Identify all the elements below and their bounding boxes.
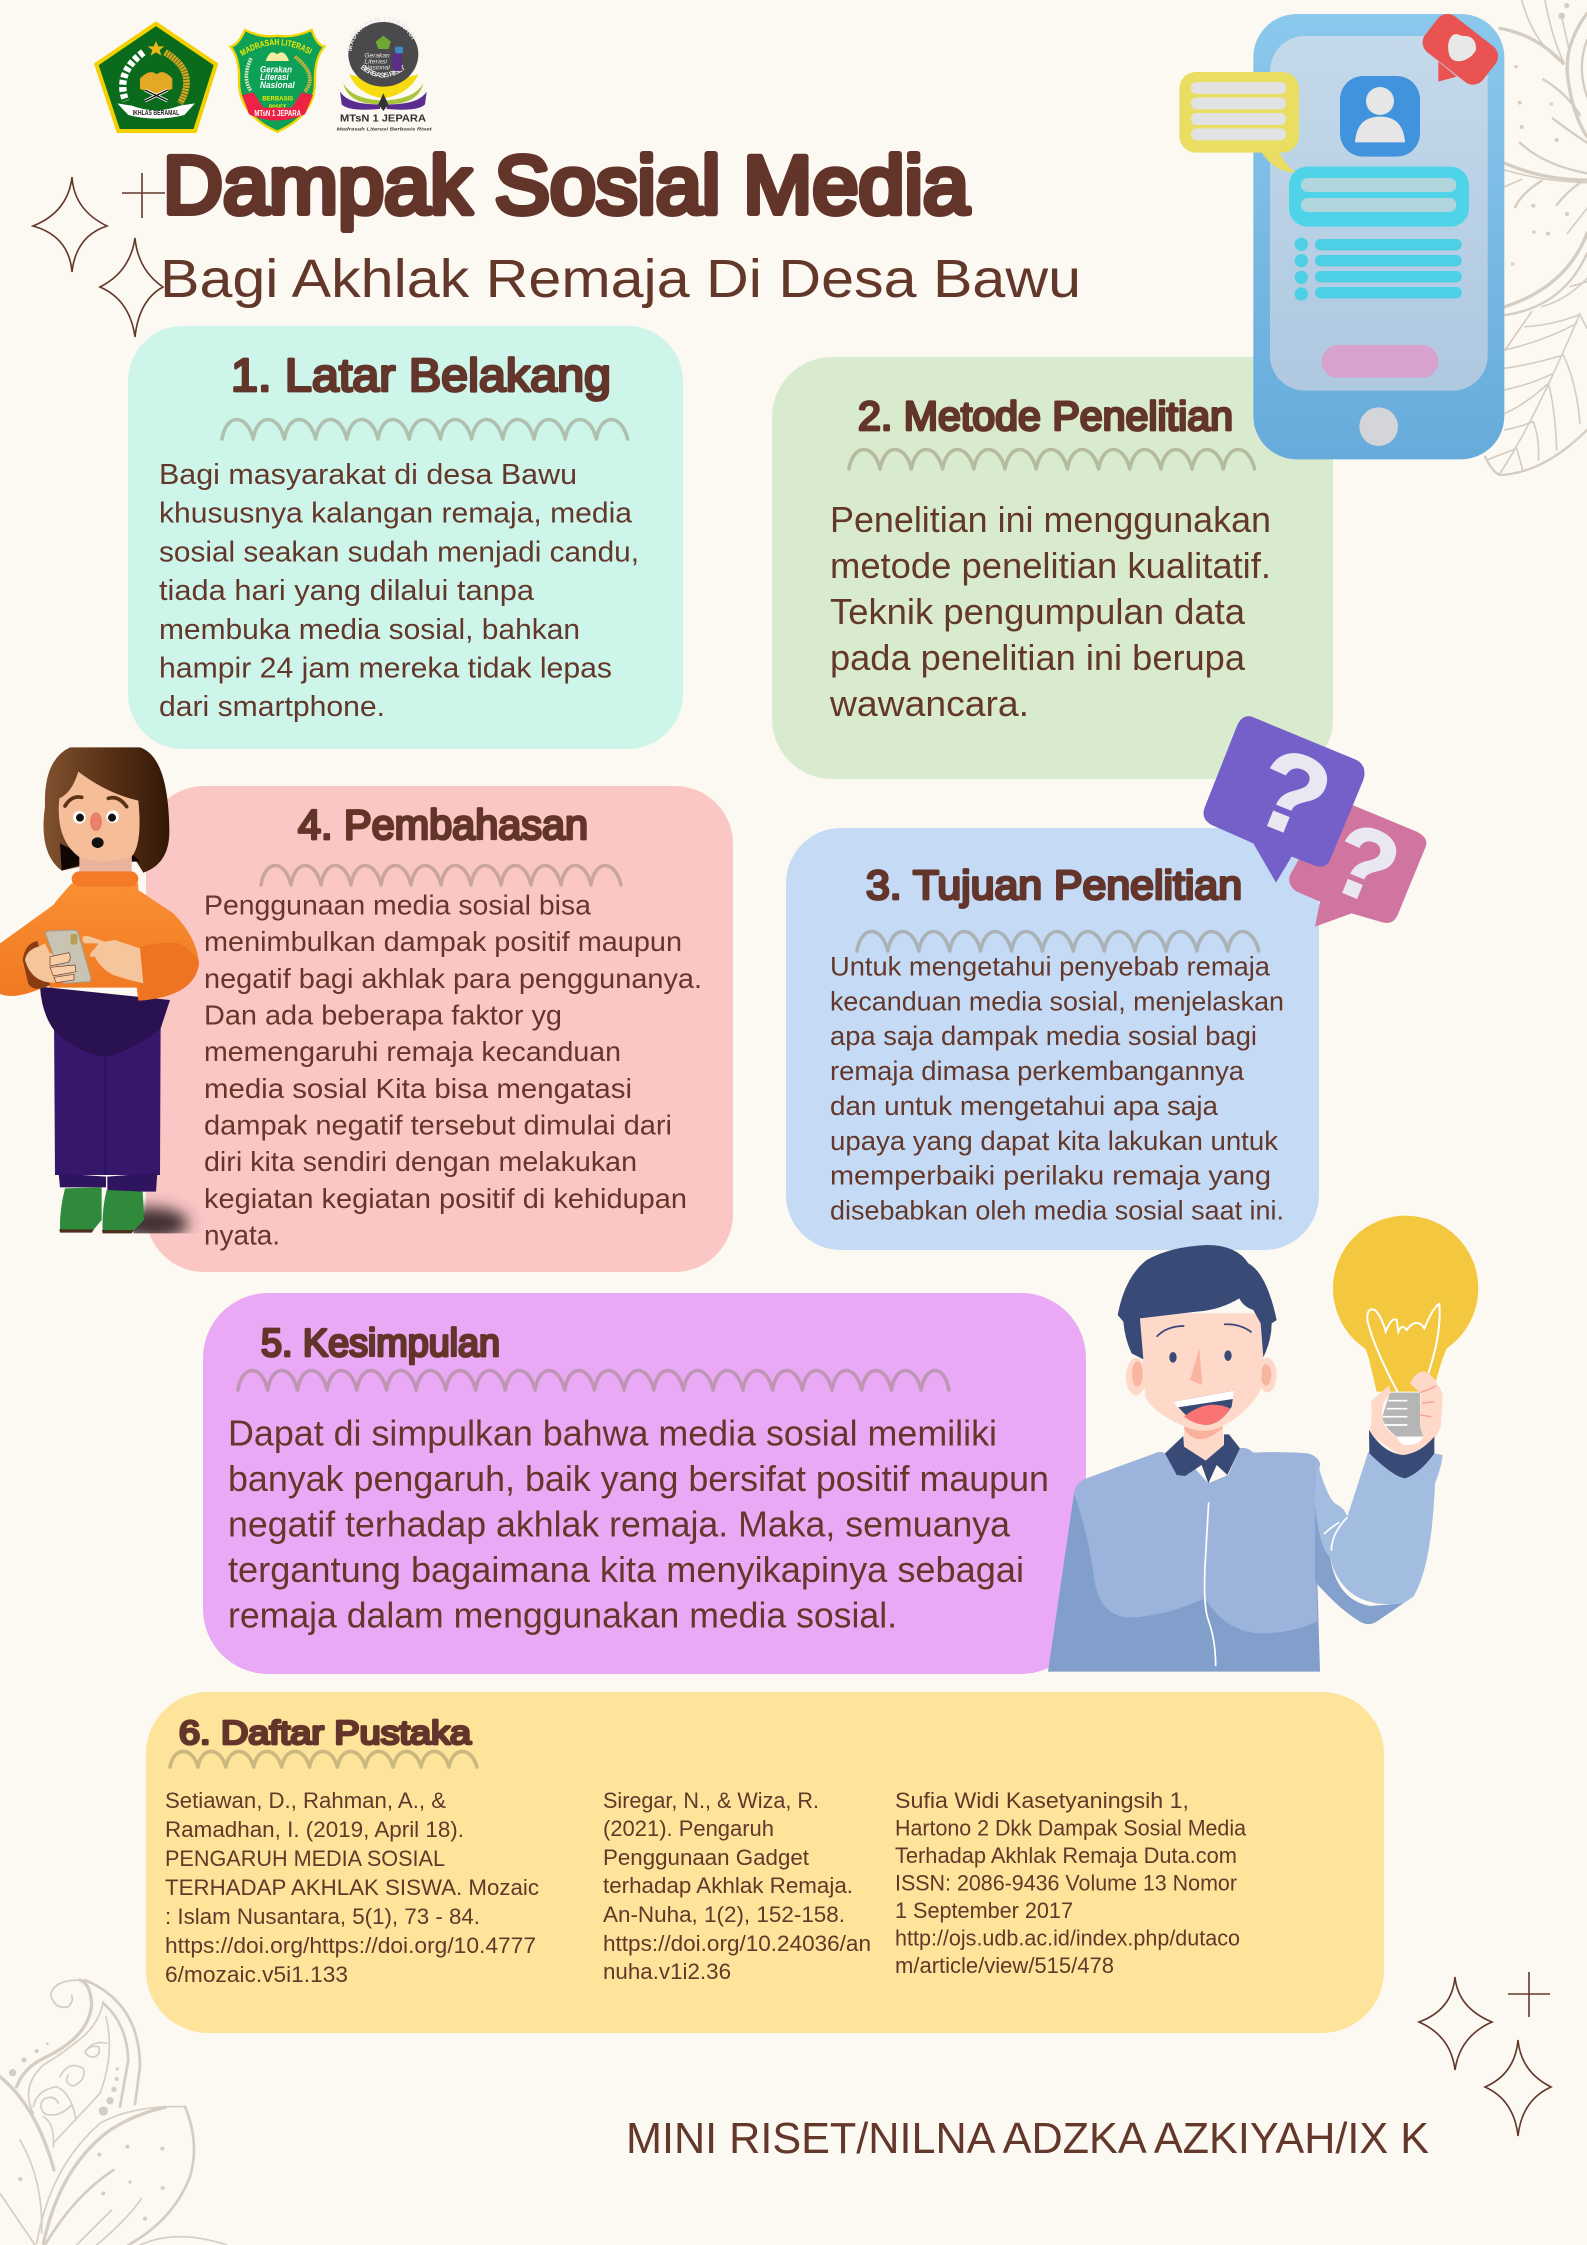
- body text: Untuk mengetahui penyebab remaja: [830, 952, 1271, 982]
- body text: negatif bagi akhlak para penggunanya.: [204, 963, 702, 994]
- body text: [204, 890, 702, 1250]
- illustration: woman holding phone: [0, 747, 199, 1239]
- facial features: [1157, 1324, 1252, 1425]
- body text: dari smartphone.: [159, 691, 385, 723]
- wavy underline: [849, 450, 1255, 469]
- body text: banyak pengaruh, baik yang bersifat positif maupun: [228, 1458, 1049, 1499]
- body text: dan untuk mengetahui apa saja: [830, 1091, 1219, 1121]
- logo: Madrasah Literasi: BERBASIS: [262, 96, 293, 102]
- reference column 2: terhadap Akhlak Remaja.: [603, 1873, 853, 1898]
- body text: Penggunaan media sosial bisa: [204, 890, 591, 920]
- panel: 2. Metode Penelitian: [772, 357, 1333, 779]
- illustration: man with light bulb: [1048, 1216, 1478, 1672]
- logo: MTsN 1 Jepara: Gerakan: [364, 52, 390, 59]
- pink bubble: ?: [1315, 801, 1414, 928]
- logo: MTsN 1 Jepara: Madrasah Literasi Berbasis Riset: [337, 126, 432, 132]
- wavy underline: [222, 420, 628, 439]
- shirt seams: [1205, 1502, 1347, 1666]
- logo: Madrasah Literasi: RISET: [269, 105, 287, 111]
- sparkle: top left second: [100, 238, 163, 337]
- body text: khususnya kalangan remaja, media: [159, 498, 633, 530]
- reference column 3: Sufia Widi Kasetyaningsih 1,: [895, 1788, 1189, 1813]
- heading: 4. Pembahasan: [298, 801, 588, 848]
- reference column 3: 1 September 2017: [895, 1898, 1073, 1923]
- body text: wawancara.: [829, 683, 1029, 724]
- sweater: [0, 883, 199, 1001]
- sparkle: plus bottom right: [1508, 1972, 1550, 2017]
- body text: Penelitian ini menggunakan: [830, 499, 1271, 540]
- body text: remaja dalam menggunakan media sosial.: [228, 1594, 897, 1636]
- shoes: [59, 1187, 144, 1233]
- sparkle: bottom right large: [1419, 1977, 1492, 2070]
- reference column 2: nuha.v1i2.36: [603, 1959, 731, 1984]
- collar: [1165, 1434, 1240, 1483]
- illustration: question mark bubbles: [1203, 716, 1426, 928]
- reference column 1: 6/mozaic.v5i1.133: [165, 1962, 348, 1987]
- body text: sosial seakan sudah menjadi candu,: [159, 536, 639, 568]
- body text: metode penelitian kualitatif.: [830, 545, 1271, 586]
- reference column 1: TERHADAP AKHLAK SISWA. Mozaic: [165, 1875, 539, 1900]
- body text: kegiatan kegiatan positif di kehidupan: [204, 1183, 687, 1214]
- logos: [94, 17, 432, 133]
- logo: Kementerian Agama: IKHLAS BERAMAL: [133, 110, 180, 117]
- yellow chat bubble: [1179, 72, 1299, 173]
- logo: Madrasah Literasi: Literasi: [260, 72, 289, 82]
- reference column 3: ISSN: 2086-9436 Volume 13 Nomor: [895, 1870, 1237, 1896]
- body text: remaja dimasa perkembangannya: [830, 1056, 1245, 1086]
- torso: [1048, 1448, 1320, 1672]
- heading: 1. Latar Belakang: [231, 349, 611, 401]
- purple bubble: [1203, 716, 1365, 883]
- logo: Madrasah Literasi: Nasional: [260, 80, 295, 90]
- hand: [1369, 1371, 1443, 1458]
- logo: MTsN 1 Jepara: [336, 17, 432, 132]
- logo: Madrasah Literasi: MTsN 1 JEPARA: [254, 109, 301, 118]
- footer credit: MINI RISET/NILNA ADZKA AZKIYAH/IX K: [626, 2114, 1429, 2163]
- sparkle: plus top left: [122, 173, 165, 218]
- reference column 1: Setiawan, D., Rahman, A., &: [165, 1788, 446, 1813]
- hair shadow: [60, 843, 140, 871]
- face: [59, 772, 140, 861]
- reference column 1: [165, 1788, 539, 1987]
- body text: dampak negatif tersebut dimulai dari: [204, 1110, 672, 1140]
- reference column 2: An-Nuha, 1(2), 152-158.: [603, 1902, 845, 1927]
- left hand fingers: [50, 953, 76, 983]
- reference column 2: (2021). Pengaruh: [603, 1816, 774, 1841]
- decoration: top right leaves: [1485, 0, 1587, 475]
- panel: 3. Tujuan Penelitian: [786, 828, 1319, 1250]
- reference column 2: Siregar, N., & Wiza, R.: [603, 1788, 819, 1813]
- body text: memengaruhi remaja kecanduan: [204, 1036, 621, 1067]
- decoration: bottom left flower: [0, 1980, 227, 2245]
- right hand: [82, 936, 143, 983]
- body text: media sosial Kita bisa mengatasi: [204, 1073, 632, 1104]
- title: Dampak Sosial Media: [163, 140, 969, 231]
- hair: [44, 747, 169, 873]
- body text: [228, 1412, 1049, 1636]
- body text: diri kita sendiri dengan melakukan: [204, 1146, 637, 1177]
- face: [1140, 1313, 1263, 1431]
- left hand: [25, 943, 76, 983]
- heading: 5. Kesimpulan: [261, 1322, 500, 1365]
- logo: Madrasah Literasi: [228, 28, 326, 133]
- light bulb: [1333, 1216, 1478, 1445]
- body text: menimbulkan dampak positif maupun: [204, 926, 682, 957]
- body text: Dan ada beberapa faktor yg: [204, 1000, 562, 1030]
- wavy underline: [238, 1370, 949, 1390]
- reference column 3: http://ojs.udb.ac.id/index.php/dutaco: [895, 1926, 1240, 1950]
- reference column 3: [895, 1788, 1247, 1978]
- body text: kecanduan media sosial, menjelaskan: [830, 986, 1284, 1016]
- body text: Dapat di simpulkan bahwa media sosial memiliki: [228, 1412, 997, 1454]
- heading: 2. Metode Penelitian: [858, 393, 1233, 439]
- body text: disebabkan oleh media sosial saat ini.: [830, 1196, 1284, 1226]
- panel: 6. Daftar Pustaka: [146, 1692, 1384, 2033]
- body text: [159, 459, 639, 723]
- subtitle: Bagi Akhlak Remaja Di Desa Bawu: [160, 249, 1081, 309]
- body text: tiada hari yang dilalui tanpa: [159, 575, 535, 607]
- body text: upaya yang dapat kita lakukan untuk: [830, 1126, 1278, 1156]
- pink button: [1322, 345, 1438, 378]
- logo: MTsN 1 Jepara: MTsN 1 JEPARA: [340, 114, 426, 125]
- logo: Madrasah Literasi: MADRASAH LITERASI: [240, 39, 312, 56]
- logo: MTsN 1 Jepara: Literasi: [364, 58, 388, 65]
- reference column 3: Hartono 2 Dkk Dampak Sosial Media: [895, 1816, 1247, 1840]
- sparkle: bottom right second: [1485, 2040, 1551, 2136]
- list rows: [1295, 238, 1462, 301]
- panel: 5. Kesimpulan: [203, 1293, 1086, 1674]
- red heart bubble: [1417, 9, 1503, 90]
- panel: 4. Pembahasan: [146, 786, 733, 1272]
- raised arm: [1315, 1452, 1443, 1604]
- sleeve shading: [138, 943, 199, 1001]
- phone in hand: [46, 930, 91, 983]
- reference column 3: Terhadap Akhlak Remaja Duta.com: [895, 1843, 1237, 1868]
- heading: 3. Tujuan Penelitian: [866, 862, 1242, 908]
- purple bubble: ?: [1237, 723, 1347, 864]
- home button: [1359, 407, 1398, 446]
- logo: MTsN 1 Jepara: MADRASAH LITERASI: [347, 17, 416, 51]
- logo: MTsN 1 Jepara: Nasional: [364, 64, 390, 71]
- cuff: [1369, 1430, 1434, 1478]
- body text: apa saja dampak media sosial bagi: [830, 1021, 1257, 1051]
- wavy underline: [857, 932, 1259, 951]
- logo: Madrasah Literasi: Gerakan: [260, 64, 292, 74]
- floor shadow: [112, 1207, 188, 1239]
- reference column 1: Ramadhan, I. (2019, April 18).: [165, 1817, 464, 1842]
- reference column 2: https://doi.org/10.24036/an: [603, 1931, 871, 1956]
- body text: [830, 952, 1284, 1226]
- body text: pada penelitian ini berupa: [830, 637, 1246, 678]
- body text: membuka media sosial, bahkan: [159, 614, 580, 646]
- body text: memperbaiki perilaku remaja yang: [830, 1161, 1271, 1191]
- logo: Kementerian Agama: [96, 24, 216, 131]
- body text: Teknik pengumpulan data: [830, 591, 1246, 632]
- hair: [1118, 1245, 1277, 1359]
- body text: tergantung bagaimana kita menyikapinya sebagai: [228, 1549, 1024, 1590]
- trousers: [40, 987, 170, 1192]
- wavy underline: [170, 1751, 477, 1767]
- body text: nyata.: [204, 1220, 280, 1250]
- wavy underline: [261, 866, 621, 885]
- reference column 1: PENGARUH MEDIA SOSIAL: [165, 1846, 445, 1871]
- body text: [829, 499, 1271, 724]
- icon: profile tile: [1340, 76, 1420, 157]
- body text: hampir 24 jam mereka tidak lepas: [159, 652, 612, 684]
- panel: 1. Latar Belakang: [128, 326, 683, 749]
- neck: [1184, 1427, 1224, 1461]
- collar: [72, 871, 138, 887]
- cyan card: [1289, 167, 1469, 227]
- reference column 2: [603, 1788, 871, 1984]
- facial features: [65, 797, 127, 848]
- reference column 1: : Islam Nusantara, 5(1), 73 - 84.: [165, 1904, 480, 1929]
- illustration: smartphone: [1179, 9, 1504, 459]
- sparkle: top left large: [33, 177, 107, 272]
- reference column 3: m/article/view/515/478: [895, 1953, 1114, 1978]
- reference column 1: https://doi.org/https://doi.org/10.4777: [165, 1933, 536, 1958]
- reference column 2: Penggunaan Gadget: [603, 1845, 809, 1870]
- ears: [1126, 1358, 1277, 1395]
- neck: [79, 853, 132, 875]
- heading: 6. Daftar Pustaka: [179, 1714, 472, 1751]
- logo: MTsN 1 Jepara: BERBASIS RISET: [360, 64, 404, 78]
- body text: Bagi masyarakat di desa Bawu: [159, 459, 577, 491]
- body text: negatif terhadap akhlak remaja. Maka, semuanya: [228, 1504, 1011, 1544]
- left cuff opening: [23, 941, 50, 989]
